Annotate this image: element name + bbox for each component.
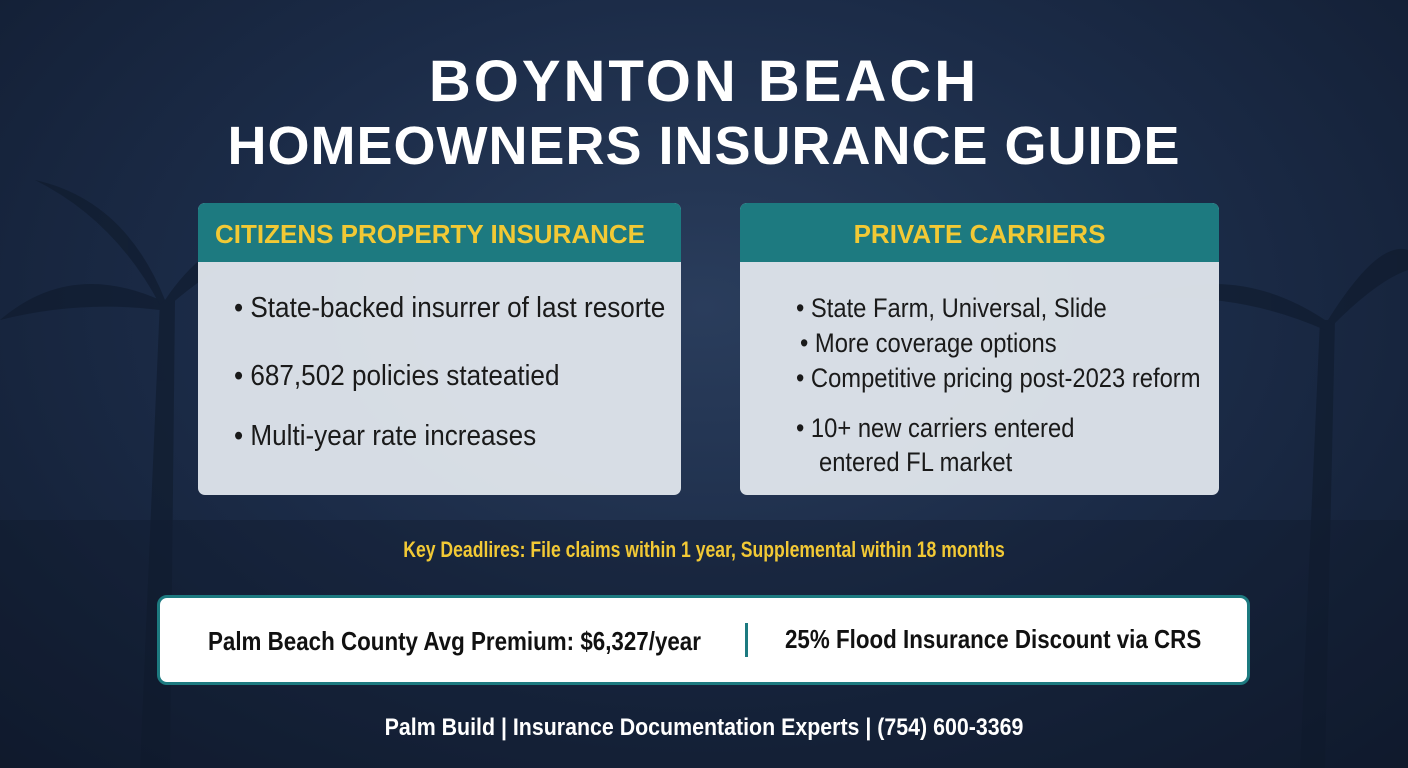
stat: flood: 25% Flood Insurance Discount via CRS (785, 624, 1201, 654)
panel: private carriers (740, 203, 1219, 495)
title (227, 49, 1181, 176)
bullet list: entered FL market (819, 447, 1012, 477)
deadline text: Key Deadlires: File claims within 1 year, Supplemental within 18 months (403, 537, 1005, 562)
heading: citizens (198, 203, 681, 262)
title: BOYNTON BEACH (429, 49, 979, 114)
stats box (157, 595, 1250, 685)
bullet list: • 10+ new carriers entered (796, 413, 1074, 443)
bullet 1: • State-backed insurrer of last resorte (234, 292, 665, 324)
heading: private: PRIVATE CARRIERS (854, 219, 1105, 249)
title: HOMEOWNERS INSURANCE GUIDE (227, 116, 1181, 176)
bullet list: • Competitive pricing post-2023 reform (796, 363, 1200, 393)
bullet 3: • Multi-year rate increases (234, 420, 536, 452)
bullet 2: • 687,502 policies stateatied (234, 360, 559, 392)
bullet list (796, 293, 1200, 477)
bullet list: • State Farm, Universal, Slide (796, 293, 1107, 323)
bullet list: • More coverage options (800, 328, 1057, 358)
heading: citizens: CITIZENS PROPERTY INSURANCE (215, 219, 645, 249)
footer: Palm Build | Insurance Documentation Experts | (754) 600-3369 (385, 714, 1023, 741)
heading: private (740, 203, 1219, 262)
divider (745, 623, 748, 657)
stat: premium: Palm Beach County Avg Premium: $6,327/year (208, 626, 701, 656)
panel: citizens (198, 203, 681, 495)
